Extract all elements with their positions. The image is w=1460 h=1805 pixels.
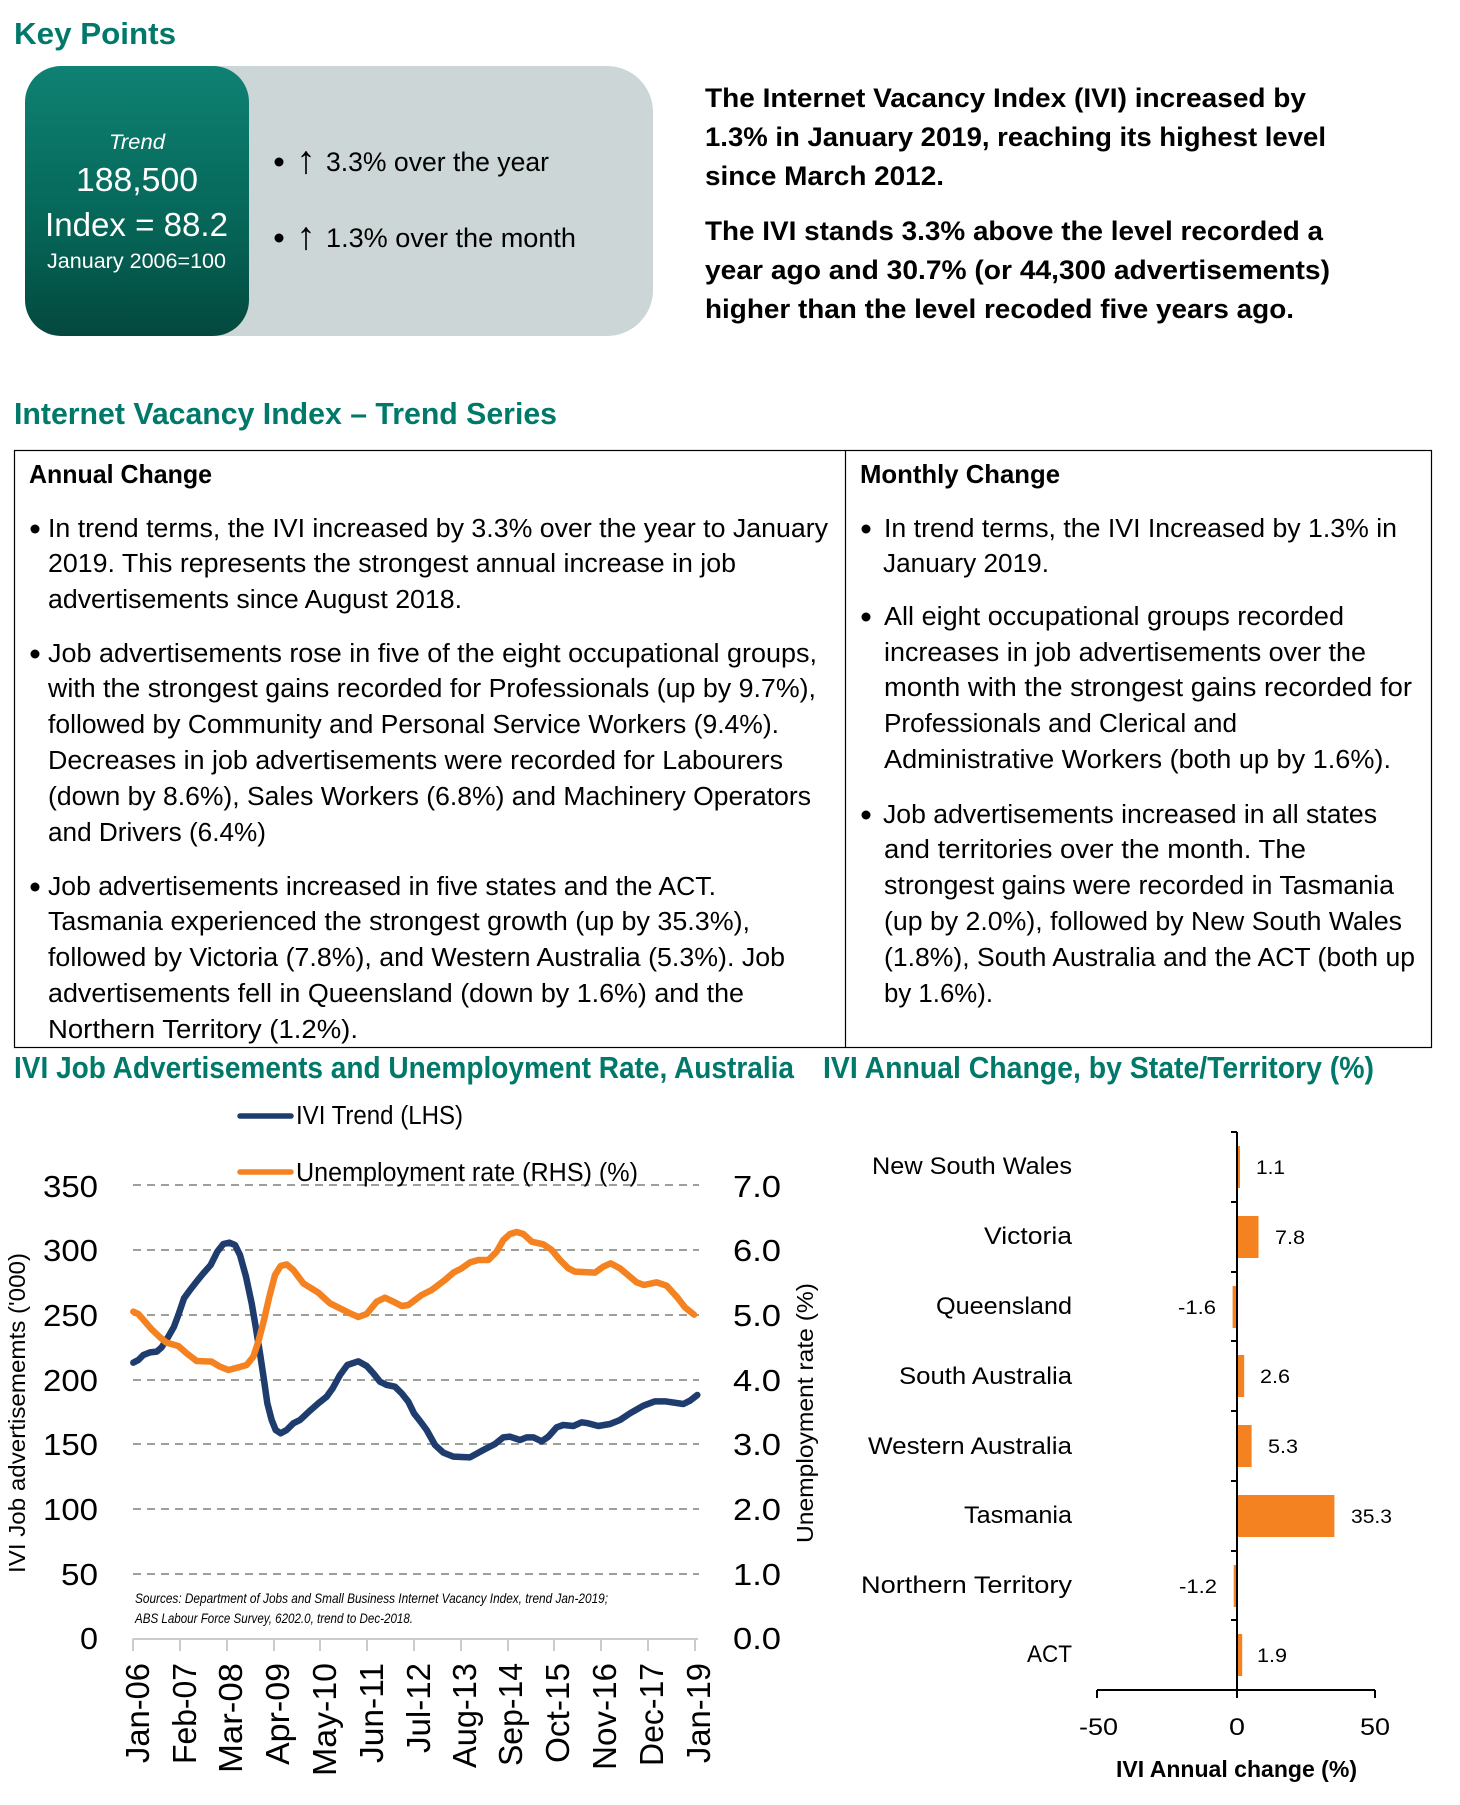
text: annual occupational groups: (down by 8.6%), Sales Workers (6.8%) and Machinery Operators — [48, 783, 811, 811]
text: monthly states: Job advertisements increased in all states — [883, 801, 1377, 829]
x axis tick labels — [1079, 1714, 1390, 1741]
text: change over the year: ↑ — [296, 139, 316, 182]
x axis labels — [119, 1663, 717, 1776]
bar chart: annual change by state — [861, 1132, 1392, 1782]
text: monthly states: (up by 2.0%), followed by New South Wales — [884, 908, 1402, 936]
value labels — [1178, 1158, 1392, 1667]
text: annual occupational groups: Job advertisements rose in five of the eight occupational groups, — [48, 640, 817, 668]
panel: trend figures: January 2006=100 — [47, 250, 226, 273]
text: monthly overall: In trend terms, the IVI Increased by 1.3% in — [884, 515, 1397, 543]
text block: key points summary: 1.3% in January 2019, reaching its highest level — [705, 122, 1326, 152]
left axis labels: 350 — [43, 1170, 98, 1204]
heading: Annual Change: Annual Change — [29, 459, 212, 489]
text: annual occupational groups: followed by Community and Personal Service Workers (9.4%). — [48, 711, 779, 739]
text: annual states: Tasmania experienced the strongest growth (up by 35.3%), — [48, 908, 750, 936]
text: change over the month: 1.3% over the month — [326, 223, 576, 253]
text: annual states: Job advertisements increased in five states and the ACT. — [48, 873, 716, 901]
text: annual states — [30, 873, 785, 1044]
x axis title: IVI Annual change (%) — [1116, 1756, 1357, 1782]
right axis labels: 7.0 — [733, 1170, 781, 1204]
text: monthly overall — [862, 515, 1397, 578]
state labels: Victoria — [984, 1223, 1073, 1250]
left axis labels: 150 — [43, 1428, 98, 1462]
right axis labels: 1.0 — [733, 1558, 781, 1592]
text: annual overall: advertisements since August 2018. — [48, 586, 462, 614]
right axis labels: 3.0 — [733, 1428, 781, 1462]
text: monthly occupational groups: increases in job advertisements over the — [884, 639, 1366, 667]
left axis labels: 0 — [80, 1622, 98, 1656]
text: monthly states — [862, 801, 1415, 1008]
left axis labels: 100 — [43, 1493, 98, 1527]
state labels: South Australia — [899, 1363, 1073, 1390]
panel: monthly change — [860, 459, 1415, 1008]
text: annual occupational groups — [30, 640, 817, 847]
text block: key points summary: The IVI stands 3.3% above the level recorded a — [705, 216, 1324, 246]
right axis labels: 0.0 — [733, 1622, 781, 1656]
left axis title: IVI Job advertisememts ('000) — [4, 1253, 30, 1573]
text: annual overall: In trend terms, the IVI increased by 3.3% over the year to January — [48, 515, 828, 543]
panel: trend figures: 188,500 — [76, 161, 198, 198]
right axis labels: 4.0 — [733, 1364, 781, 1398]
right axis labels: 2.0 — [733, 1493, 781, 1527]
text: annual states: followed by Victoria (7.8%), and Western Australia (5.3%). Job — [48, 944, 785, 972]
text: monthly states: and territories over the month. The — [884, 836, 1306, 864]
panel: trend figures: Index = 88.2 — [45, 206, 228, 243]
legend: unemployment rate: Unemployment rate (RHS) (%) — [296, 1159, 638, 1187]
text: monthly occupational groups: All eight occupational groups recorded — [884, 603, 1344, 631]
left axis labels: 300 — [43, 1234, 98, 1268]
text: monthly states: (1.8%), South Australia and the ACT (both up — [884, 944, 1415, 972]
text: change over the year — [274, 139, 549, 182]
bars — [1233, 1146, 1334, 1676]
value labels: 2.6 — [1260, 1367, 1290, 1388]
heading: bar chart title: IVI Annual Change, by State/Territory (%) — [823, 1051, 1374, 1085]
value labels: -1.6 — [1178, 1298, 1216, 1319]
text block: key points summary: year ago and 30.7% (or 44,300 advertisements) — [705, 255, 1330, 285]
line: IVI trend — [133, 1243, 697, 1457]
heading: line chart title: IVI Job Advertisements and Unemployment Rate, Australia — [14, 1051, 795, 1085]
x axis labels: Feb-07 — [166, 1663, 203, 1764]
text block: key points summary: The Internet Vacancy Index (IVI) increased by — [705, 83, 1306, 113]
state labels: Queensland — [936, 1293, 1072, 1320]
text: annual overall: 2019. This represents the strongest annual increase in job — [48, 550, 736, 578]
x axis labels: Jun-11 — [353, 1663, 390, 1763]
state labels — [861, 1153, 1073, 1668]
x axis labels: Apr-09 — [259, 1663, 296, 1765]
text: monthly occupational groups: Professionals and Clerical and — [884, 710, 1237, 738]
state labels: Northern Territory — [861, 1572, 1072, 1599]
right axis title: Unemployment rate (%) — [792, 1283, 818, 1543]
state labels: ACT — [1027, 1641, 1072, 1668]
state labels: Western Australia — [868, 1433, 1073, 1460]
value labels: -1.2 — [1179, 1577, 1217, 1598]
panel: trend figures — [25, 66, 249, 336]
text: monthly occupational groups — [862, 603, 1413, 774]
legend: IVI trend: IVI Trend (LHS) — [296, 1102, 463, 1130]
state labels: Tasmania — [964, 1502, 1073, 1529]
x axis labels: Oct-15 — [539, 1663, 576, 1763]
text: monthly states: strongest gains were recorded in Tasmania — [884, 872, 1395, 900]
panel: trend summary — [25, 66, 653, 336]
value labels: 1.1 — [1256, 1158, 1285, 1179]
x axis line — [132, 1639, 698, 1651]
text: annual occupational groups: Decreases in job advertisements were recorded for Labourers — [48, 747, 783, 775]
text: annual occupational groups: with the strongest gains recorded for Professionals (up by 9.7%), — [47, 675, 816, 703]
text: change over the month: ↑ — [296, 215, 316, 258]
x axis tick labels: 0 — [1229, 1714, 1245, 1741]
panel: trend series commentary table — [14, 450, 1432, 1048]
right axis labels: 6.0 — [733, 1234, 781, 1268]
x axis labels: Aug-13 — [446, 1663, 483, 1768]
value labels: 5.3 — [1268, 1437, 1298, 1458]
x axis tick labels: 50 — [1360, 1714, 1390, 1741]
text: annual occupational groups: and Drivers (6.4%) — [48, 819, 266, 847]
left axis labels: 250 — [43, 1299, 98, 1333]
left axis labels: 200 — [43, 1364, 98, 1398]
text block: key points summary — [705, 83, 1330, 324]
value labels: 1.9 — [1257, 1646, 1287, 1667]
x axis tick labels: -50 — [1079, 1714, 1118, 1741]
x axis labels: Sep-14 — [492, 1663, 529, 1766]
text block: key points summary: higher than the level recoded five years ago. — [705, 294, 1294, 324]
line chart: IVI and unemployment rate — [4, 1102, 818, 1776]
panel: trend figures: Trend — [109, 131, 166, 154]
left axis labels: 50 — [61, 1558, 98, 1592]
text: annual overall — [30, 515, 828, 614]
x axis labels: May-10 — [306, 1663, 343, 1776]
axes — [1097, 1132, 1375, 1698]
x axis labels: Jan-06 — [119, 1663, 156, 1763]
x axis labels: Nov-16 — [586, 1663, 623, 1770]
source note: Sources: Department of Jobs and Small Business Internet Vacancy Index, trend Jan-2019; — [135, 1590, 608, 1606]
text block: key points summary: since March 2012. — [705, 161, 944, 191]
text: monthly states: by 1.6%). — [884, 980, 993, 1008]
heading: Key Points: Key Points — [14, 17, 176, 51]
x axis labels: Dec-17 — [633, 1663, 670, 1766]
text: change over the month — [274, 215, 576, 258]
heading: Internet Vacancy Index Trend Series: Internet Vacancy Index – Trend Series — [14, 397, 557, 431]
left axis labels — [43, 1170, 98, 1656]
panel: annual change — [29, 459, 828, 1044]
text: monthly occupational groups: month with the strongest gains recorded for — [884, 674, 1413, 702]
value labels: 7.8 — [1275, 1228, 1305, 1249]
text: monthly overall: January 2019. — [883, 550, 1049, 578]
value labels: 35.3 — [1351, 1507, 1392, 1528]
text: monthly occupational groups: Administrative Workers (both up by 1.6%). — [884, 746, 1391, 774]
heading: Monthly Change: Monthly Change — [860, 459, 1060, 489]
right axis labels — [733, 1170, 781, 1656]
state labels: New South Wales — [872, 1153, 1072, 1180]
x axis labels: Jan-19 — [680, 1663, 717, 1763]
right axis labels: 5.0 — [733, 1299, 781, 1333]
line: unemployment rate — [133, 1232, 694, 1370]
text: change over the year: 3.3% over the year — [326, 147, 549, 177]
source note: ABS Labour Force Survey, 6202.0, trend to Dec-2018. — [134, 1610, 413, 1626]
x axis labels: Mar-08 — [212, 1663, 249, 1773]
text: annual states: Northern Territory (1.2%). — [48, 1016, 358, 1044]
x axis labels: Jul-12 — [400, 1663, 437, 1753]
text: annual states: advertisements fell in Queensland (down by 1.6%) and the — [48, 980, 744, 1008]
source note — [134, 1590, 608, 1626]
